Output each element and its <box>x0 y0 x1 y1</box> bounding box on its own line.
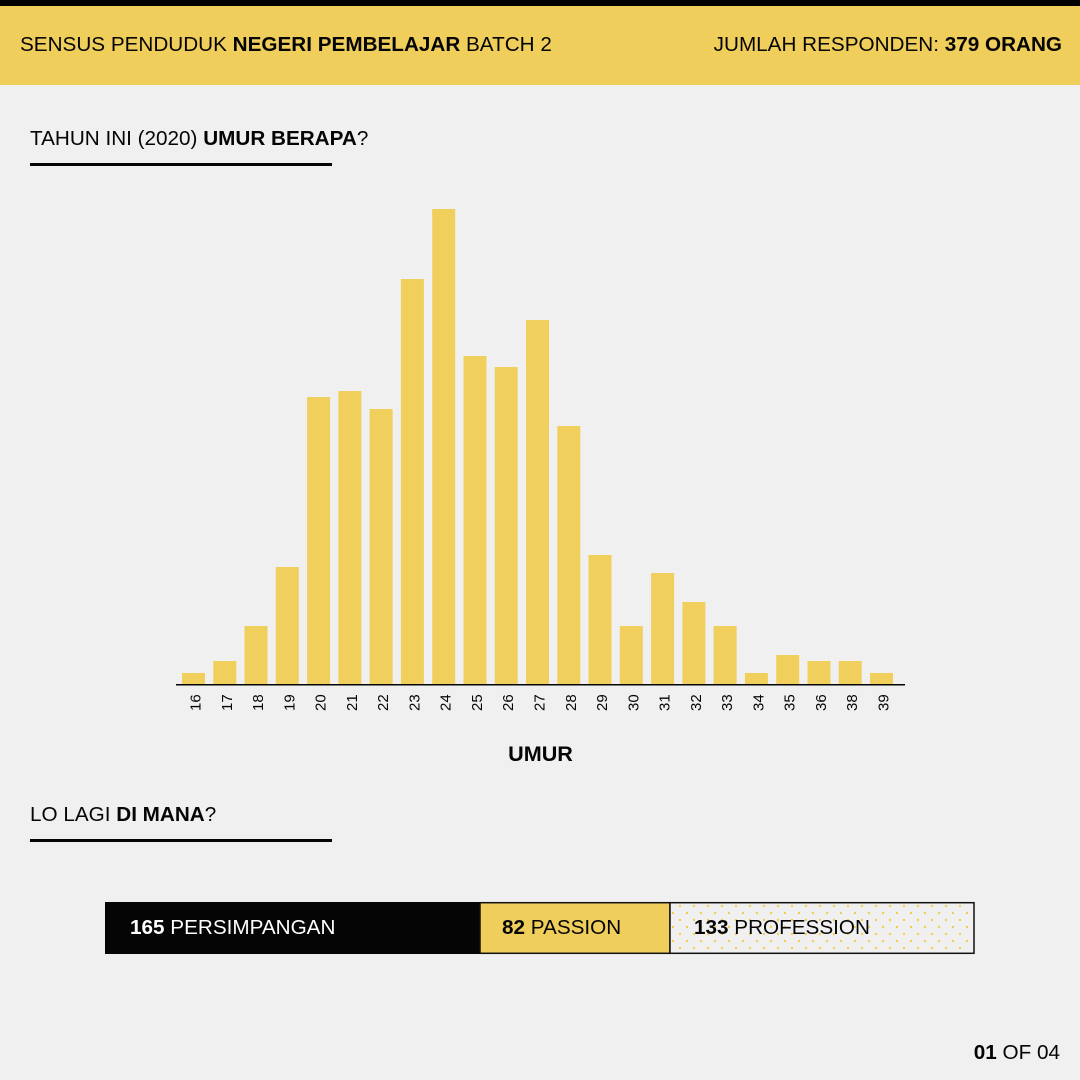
header title: SENSUS PENDUDUK NEGERI PEMBELAJAR BATCH 2 <box>20 33 552 56</box>
age tick labels: 24 <box>438 694 455 711</box>
age tick labels: 25 <box>469 694 486 711</box>
heading: location question <box>30 803 332 842</box>
age tick labels: 31 <box>657 694 674 711</box>
age tick labels: 23 <box>406 694 423 711</box>
heading: location question: LO LAGI DI MANA? <box>30 803 216 826</box>
age tick labels: 16 <box>188 694 204 711</box>
x axis title: UMUR <box>508 741 573 766</box>
age tick labels: 26 <box>500 694 517 711</box>
age tick labels: 29 <box>594 694 611 711</box>
segment: persimpangan <box>105 902 480 954</box>
age tick labels: 28 <box>563 694 580 711</box>
age tick labels: 35 <box>782 694 799 711</box>
age tick labels: 27 <box>532 694 548 711</box>
age tick labels: 19 <box>281 694 298 711</box>
segment: persimpangan: 165 PERSIMPANGAN <box>130 916 335 939</box>
age tick labels <box>188 694 892 711</box>
age tick labels: 36 <box>813 694 830 711</box>
x axis line <box>176 684 905 686</box>
segment: profession <box>670 903 974 953</box>
age tick labels: 38 <box>844 694 861 711</box>
bars <box>182 209 893 684</box>
segment: profession: 133 PROFESSION <box>694 916 870 939</box>
heading: age question: TAHUN INI (2020) UMUR BERAPA? <box>30 127 368 150</box>
age tick labels: 17 <box>219 694 236 711</box>
page number: 01 OF 04 <box>974 1041 1060 1064</box>
heading: age question <box>30 127 368 166</box>
stacked bar: location split <box>105 902 974 954</box>
respondent count: JUMLAH RESPONDEN: 379 ORANG <box>714 33 1062 56</box>
segment: passion: 82 PASSION <box>502 916 621 939</box>
age tick labels: 21 <box>344 694 361 711</box>
bar chart: age distribution <box>176 209 905 766</box>
age tick labels: 33 <box>719 694 736 711</box>
age tick labels: 18 <box>250 694 267 711</box>
age tick labels: 22 <box>375 694 392 711</box>
age tick labels: 34 <box>750 694 767 711</box>
age tick labels: 39 <box>876 694 892 711</box>
age tick labels: 30 <box>625 694 642 711</box>
age tick labels: 20 <box>313 694 330 711</box>
header band <box>0 0 1080 85</box>
age tick labels: 32 <box>688 694 705 711</box>
segment: passion <box>480 903 670 953</box>
